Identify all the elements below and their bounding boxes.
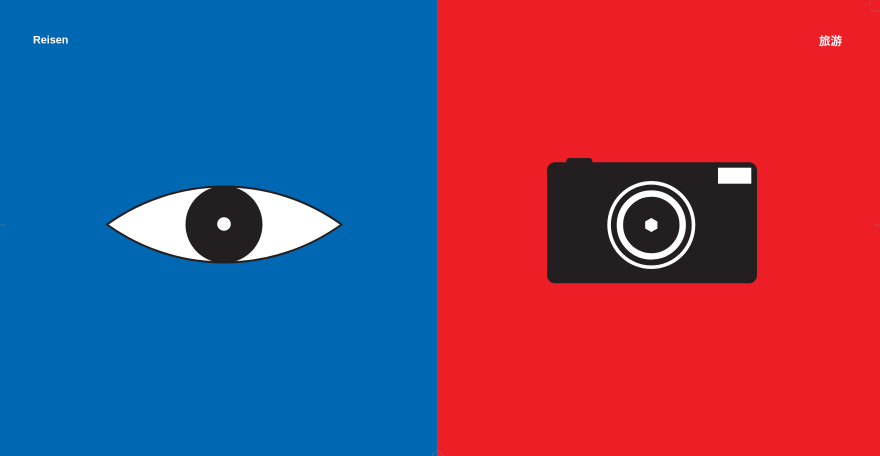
heading: Reisen: Reisen bbox=[33, 34, 68, 46]
heading: 旅游: 旅游 bbox=[819, 34, 842, 48]
lens inner ring bbox=[620, 194, 683, 256]
icon: camera bbox=[547, 158, 757, 283]
camera body bbox=[547, 162, 757, 283]
eye white bbox=[107, 187, 342, 262]
camera viewfinder bbox=[718, 168, 751, 184]
panel: blue background bbox=[0, 0, 438, 456]
panel: red background bbox=[438, 0, 880, 456]
lens outer ring bbox=[609, 183, 694, 267]
camera shutter button bbox=[566, 158, 592, 168]
eye highlight bbox=[217, 217, 231, 231]
lens aperture bbox=[645, 218, 657, 232]
icon: eye bbox=[107, 186, 342, 263]
eye pupil bbox=[186, 186, 262, 263]
